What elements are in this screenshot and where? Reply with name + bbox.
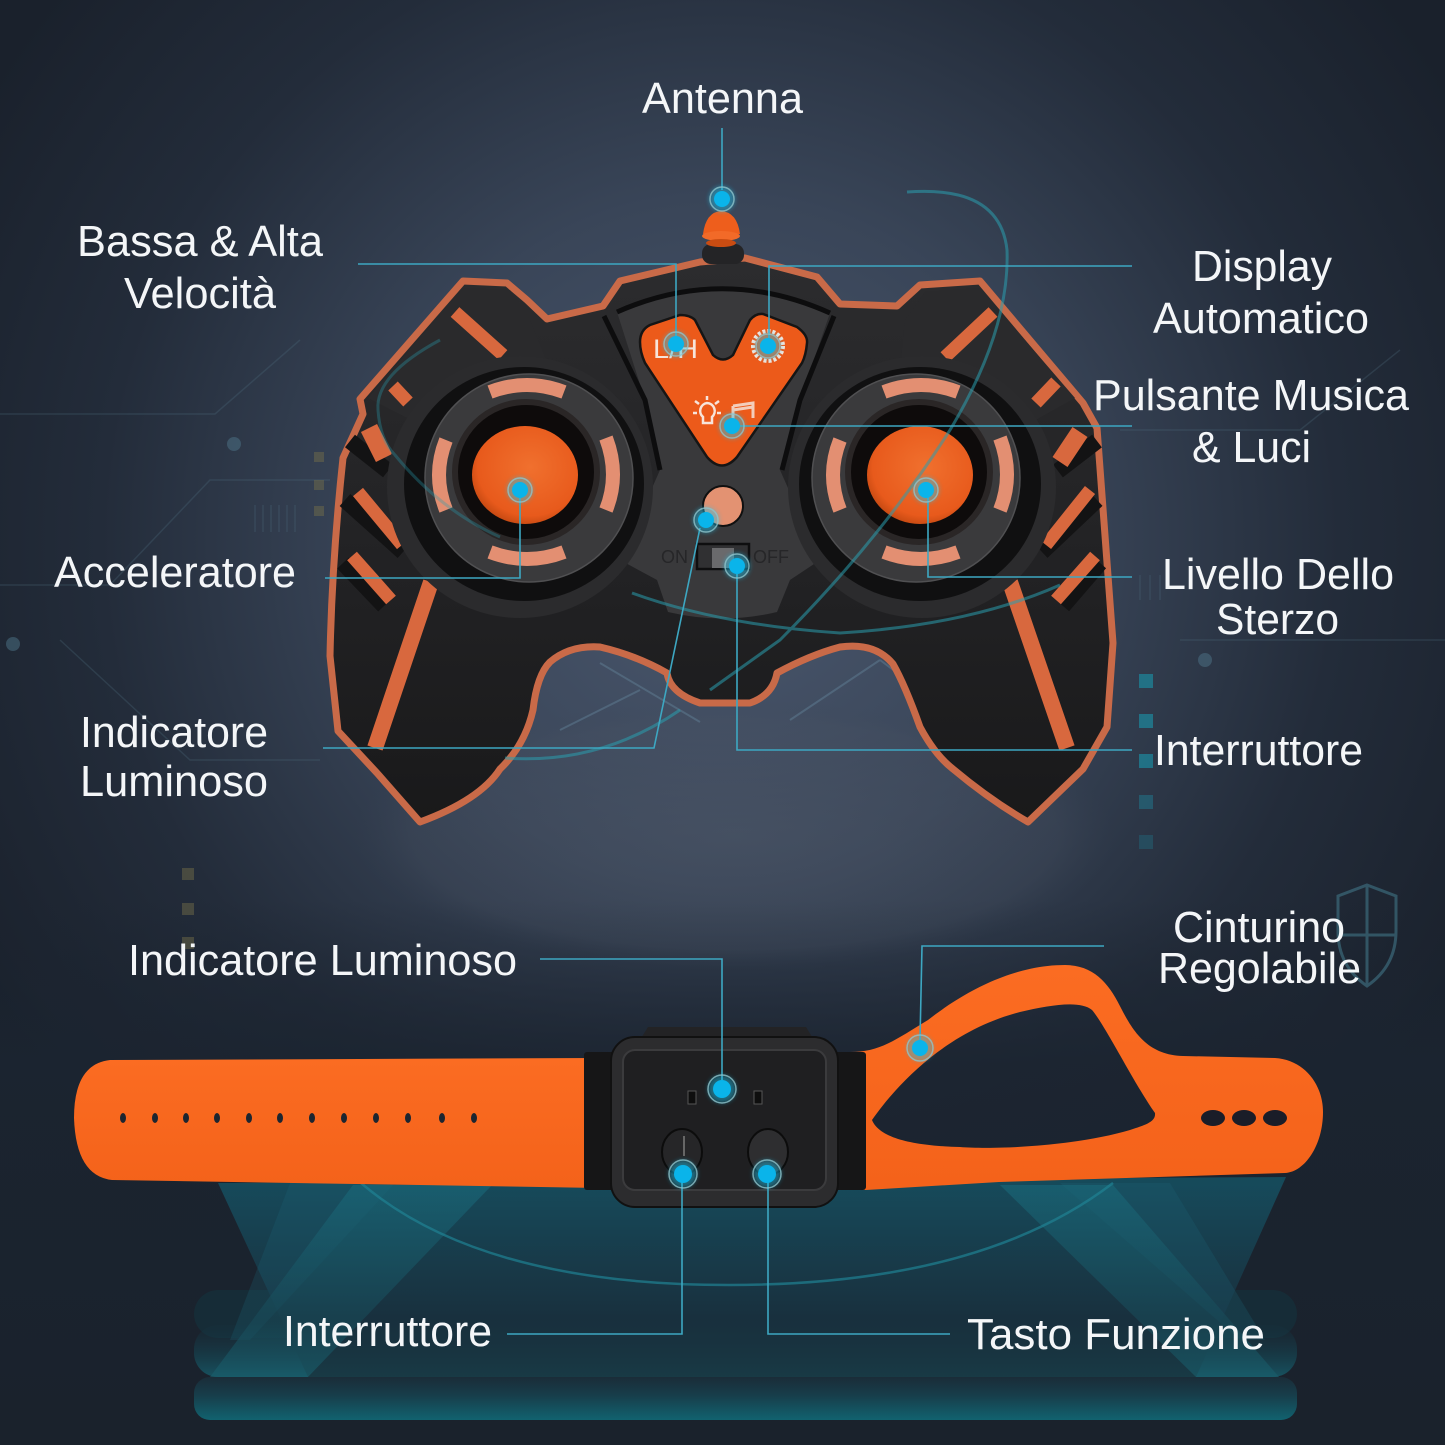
wrist strap [74,965,1323,1207]
decorative teal arcs [378,191,1060,759]
indicator button [703,486,743,526]
label: Pulsante Musica & Luci: Pulsante Musica [1093,371,1410,420]
label: Antenna: Antenna [642,74,804,123]
leader lines [323,128,1132,1334]
label: Bassa & Alta Velocità: Bassa & Alta [77,217,324,266]
decorative floor beams [194,1177,1297,1420]
label: Interruttore: Interruttore [1154,726,1363,775]
orange stripes [352,312,1095,748]
label: Cinturino Regolabile: Regolabile [1158,944,1361,993]
label: Indicatore Luminoso: Indicatore [80,708,268,757]
controller [330,211,1113,822]
label: Pulsante Musica & Luci: & Luci [1192,423,1311,472]
label: Indicatore Luminoso [80,708,268,806]
centre console [617,289,830,618]
label: Pulsante Musica & Luci [1093,371,1410,472]
label: Interruttore (strap): Interruttore [283,1307,492,1356]
label: Cinturino Regolabile [1158,903,1361,993]
power switch: ON [661,547,688,567]
label: Tasto Funzione: Tasto Funzione [967,1310,1265,1359]
strap: right loop [850,965,1323,1190]
label: Cinturino Regolabile: Cinturino [1173,903,1345,952]
icon: shield watermark [1338,885,1396,986]
strap: buckle holes [1201,1110,1287,1126]
power switch [661,544,789,569]
callout markers [507,186,939,1188]
icon: gear [753,331,783,361]
strap: left band [74,1058,600,1188]
icon: bulb [693,396,721,423]
side panels [368,288,550,440]
L/H label: L/H [653,334,698,364]
label: Indicatore Luminoso: Luminoso [80,757,268,806]
strap holes [120,1113,477,1123]
antenna [702,211,744,264]
watch module [584,1027,866,1207]
label: Bassa & Alta Velocità: Velocità [124,269,277,318]
label: Livello Dello Sterzo: Livello Dello [1162,550,1394,599]
label: Display Automatico: Display [1192,242,1332,291]
icon: music [733,403,753,420]
label: Livello Dello Sterzo: Sterzo [1216,595,1339,644]
label: Indicatore Luminoso (strap): Indicatore Luminoso [128,936,517,985]
orange mode panel [640,314,807,466]
label: Display Automatico: Automatico [1153,294,1369,343]
label: Display Automatico [1153,242,1369,343]
label: Livello Dello Sterzo [1162,550,1394,644]
right joystick [788,356,1056,618]
label: Acceleratore: Acceleratore [54,548,296,597]
left joystick [387,356,653,618]
power switch: OFF [753,547,789,567]
controller body [330,258,1113,822]
label: Bassa & Alta Velocità [77,217,324,318]
